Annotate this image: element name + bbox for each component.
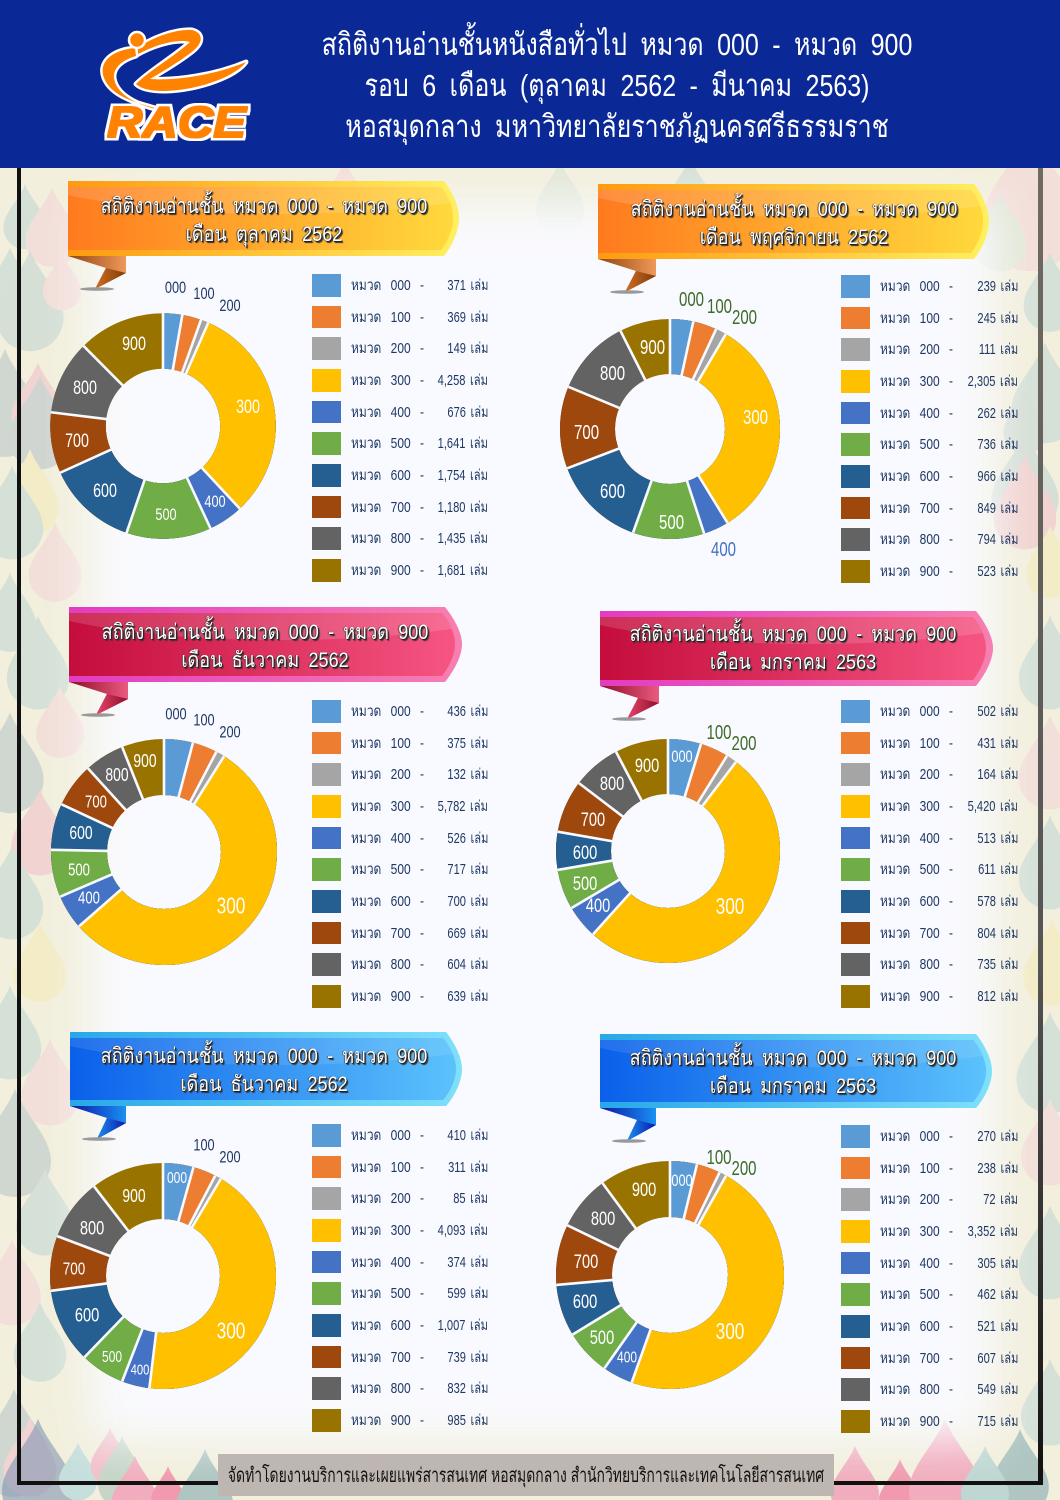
donut chart: 300: [236, 396, 260, 418]
legend: หมวด 400 -: [880, 830, 953, 847]
legend: [312, 700, 488, 1008]
legend: หมวด 600 -: [351, 893, 424, 910]
legend: 599 เล่ม: [447, 1285, 488, 1302]
banner heading: เดือน มกราคม 2563: [710, 650, 876, 674]
legend: 4,093 เล่ม: [438, 1222, 488, 1239]
legend: หมวด 200 -: [351, 766, 424, 783]
legend: 1,007 เล่ม: [438, 1317, 488, 1334]
legend: 305 เล่ม: [977, 1255, 1018, 1272]
legend: หมวด 100 -: [880, 735, 953, 752]
donut chart: 200: [219, 722, 241, 742]
legend: หมวด 900 -: [351, 1412, 424, 1429]
legend: 526 เล่ม: [447, 830, 488, 847]
legend: [841, 275, 1018, 583]
legend: หมวด 300 -: [880, 1223, 953, 1240]
legend: 85 เล่ม: [453, 1190, 488, 1207]
donut chart: 900: [640, 336, 665, 358]
donut chart: 800: [105, 765, 129, 785]
donut chart: 700: [65, 430, 89, 452]
legend: 239 เล่ม: [977, 278, 1018, 295]
legend: 1,180 เล่ม: [438, 499, 488, 516]
donut chart: 400: [617, 1348, 637, 1366]
donut chart: 500: [68, 860, 90, 880]
legend: หมวด 300 -: [351, 798, 424, 815]
donut chart: 900: [635, 754, 659, 776]
legend: 502 เล่ม: [977, 703, 1018, 720]
donut chart: 800: [600, 362, 625, 384]
donut chart: 200: [732, 1157, 757, 1179]
legend: 311 เล่ม: [448, 1159, 488, 1176]
legend: หมวด 600 -: [351, 467, 424, 484]
donut chart: 100: [193, 1135, 215, 1155]
title: รอบ 6 เดือน (ตุลาคม 2562 - มีนาคม 2563): [364, 68, 870, 103]
donut chart: 000: [165, 278, 186, 298]
banner heading: สถิติงานอ่านชั้น หมวด 000 - หมวด 900: [101, 194, 427, 218]
donut chart: 500: [102, 1347, 122, 1365]
donut chart: 500: [155, 505, 177, 525]
legend: 604 เล่ม: [447, 956, 488, 973]
legend: หมวด 800 -: [351, 1380, 424, 1397]
legend: หมวด 200 -: [351, 340, 424, 357]
legend: หมวด 900 -: [880, 563, 953, 580]
panel: December 2562: [51, 607, 488, 1008]
donut chart: 100: [707, 295, 732, 317]
legend: 513 เล่ม: [977, 830, 1018, 847]
banner heading: สถิติงานอ่านชั้น หมวด 000 - หมวด 900: [101, 1044, 427, 1068]
banner heading: สถิติงานอ่านชั้น หมวด 000 - หมวด 900: [630, 1046, 956, 1070]
legend: [841, 1125, 1018, 1433]
legend: หมวด 000 -: [351, 1127, 424, 1144]
donut chart: 600: [69, 823, 93, 843]
legend: หมวด 100 -: [880, 1160, 953, 1177]
donut chart: 600: [93, 480, 117, 502]
banner: [68, 181, 459, 291]
legend: หมวด 800 -: [351, 956, 424, 973]
donut chart: 300: [217, 894, 245, 918]
panel: October 2562: [50, 181, 488, 582]
legend: หมวด 800 -: [880, 1381, 953, 1398]
donut chart: 500: [573, 872, 597, 894]
legend: หมวด 100 -: [351, 309, 424, 326]
banner: [598, 184, 989, 294]
legend: 578 เล่ม: [977, 893, 1018, 910]
banner heading: สถิติงานอ่านชั้น หมวด 000 - หมวด 900: [102, 620, 428, 644]
legend: 410 เล่ม: [447, 1127, 488, 1144]
legend: 700 เล่ม: [447, 893, 488, 910]
legend: 849 เล่ม: [977, 500, 1018, 517]
legend: [841, 700, 1018, 1008]
banner heading: เดือน พฤศจิกายน 2562: [700, 225, 888, 249]
legend: 164 เล่ม: [977, 766, 1018, 783]
banner: [70, 1032, 462, 1141]
legend: 111 เล่ม: [979, 341, 1018, 358]
donut chart: 100: [707, 721, 732, 743]
legend: 736 เล่ม: [977, 436, 1018, 453]
title: สถิติงานอ่านชั้นหนังสือทั่วไป หมวด 000 - หมวด 900: [322, 27, 912, 62]
legend: 985 เล่ม: [447, 1412, 488, 1429]
donut chart: [50, 278, 276, 539]
banner heading: [630, 618, 958, 674]
legend: หมวด 400 -: [351, 830, 424, 847]
legend: 374 เล่ม: [447, 1254, 488, 1271]
legend: หมวด 900 -: [880, 1413, 953, 1430]
donut chart: [556, 1146, 784, 1389]
legend: หมวด 400 -: [351, 1254, 424, 1271]
legend: หมวด 000 -: [351, 277, 424, 294]
banner heading: เดือน ธันวาคม 2562: [180, 1072, 348, 1096]
legend: หมวด 200 -: [880, 341, 953, 358]
legend: หมวด 700 -: [880, 925, 953, 942]
legend: 149 เล่ม: [447, 340, 488, 357]
donut chart: 000: [679, 288, 704, 310]
legend: หมวด 500 -: [880, 436, 953, 453]
donut chart: 500: [590, 1326, 614, 1348]
donut chart: 600: [600, 480, 625, 502]
legend: 238 เล่ม: [977, 1160, 1018, 1177]
legend: [312, 274, 488, 582]
banner: [600, 1034, 992, 1143]
legend: 735 เล่ม: [977, 956, 1018, 973]
donut chart: 400: [711, 538, 736, 560]
donut chart: 900: [122, 333, 146, 355]
donut chart: 800: [600, 772, 624, 794]
legend: หมวด 800 -: [880, 956, 953, 973]
donut chart: 000: [167, 1168, 187, 1186]
panel: January 2563: [556, 611, 1018, 1008]
donut chart: [556, 721, 780, 963]
legend: หมวด 500 -: [880, 861, 953, 878]
legend: 715 เล่ม: [977, 1413, 1018, 1430]
donut chart: 700: [85, 792, 107, 812]
legend: 832 เล่ม: [447, 1380, 488, 1397]
legend: หมวด 200 -: [880, 1191, 953, 1208]
legend: หมวด 100 -: [351, 1159, 424, 1176]
donut chart: 700: [63, 1259, 85, 1279]
legend: หมวด 700 -: [880, 1350, 953, 1367]
legend: หมวด 700 -: [351, 925, 424, 942]
donut chart: [50, 1135, 276, 1389]
legend: 262 เล่ม: [977, 405, 1018, 422]
legend: 812 เล่ม: [977, 988, 1018, 1005]
donut chart: 500: [659, 511, 684, 533]
legend: หมวด 800 -: [351, 530, 424, 547]
legend: หมวด 700 -: [880, 500, 953, 517]
footer credit: [218, 1454, 834, 1496]
legend: หมวด 600 -: [880, 468, 953, 485]
donut chart: 900: [122, 1186, 146, 1206]
donut chart: 200: [219, 296, 241, 316]
banner heading: สถิติงานอ่านชั้น หมวด 000 - หมวด 900: [630, 622, 956, 646]
donut chart: 400: [204, 492, 226, 512]
legend: หมวด 600 -: [880, 893, 953, 910]
legend: 72 เล่ม: [983, 1191, 1018, 1208]
legend: หมวด 300 -: [351, 372, 424, 389]
donut chart: 900: [632, 1178, 656, 1200]
donut chart: 900: [133, 751, 157, 771]
legend: 549 เล่ม: [977, 1381, 1018, 1398]
donut chart: [560, 288, 780, 560]
banner heading: [630, 1042, 958, 1098]
legend: หมวด 600 -: [880, 1318, 953, 1335]
donut chart: 100: [707, 1146, 732, 1168]
legend: หมวด 200 -: [880, 766, 953, 783]
panel: November 2562: [560, 184, 1018, 583]
donut chart: 600: [75, 1303, 99, 1325]
banner heading: [102, 616, 430, 672]
legend: 607 เล่ม: [977, 1350, 1018, 1367]
legend: 5,420 เล่ม: [968, 798, 1018, 815]
legend: 521 เล่ม: [977, 1318, 1018, 1335]
legend: 3,352 เล่ม: [968, 1223, 1018, 1240]
legend: หมวด 100 -: [351, 735, 424, 752]
donut chart: 700: [574, 1250, 598, 1272]
donut chart: 200: [732, 306, 757, 328]
title: หอสมุดกลาง มหาวิทยาลัยราชภัฏนครศรีธรรมราช: [345, 109, 889, 144]
legend: 804 เล่ม: [977, 925, 1018, 942]
legend: หมวด 500 -: [880, 1286, 953, 1303]
legend: 1,754 เล่ม: [438, 467, 488, 484]
legend: 669 เล่ม: [447, 925, 488, 942]
legend: 371 เล่ม: [447, 277, 488, 294]
donut chart: 600: [573, 1290, 597, 1312]
legend: 966 เล่ม: [977, 468, 1018, 485]
donut chart: 000: [671, 747, 693, 767]
banner: [600, 611, 993, 721]
legend: หมวด 000 -: [880, 1128, 953, 1145]
donut chart: 300: [743, 406, 768, 428]
legend: 462 เล่ม: [977, 1286, 1018, 1303]
donut chart: 000: [165, 704, 187, 724]
donut chart: [51, 704, 277, 965]
banner heading: เดือน มกราคม 2563: [710, 1074, 876, 1098]
donut chart: 700: [581, 808, 605, 830]
header band: [0, 0, 1060, 168]
legend: 611 เล่ม: [978, 861, 1018, 878]
legend: หมวด 700 -: [351, 1349, 424, 1366]
legend: 794 เล่ม: [977, 531, 1018, 548]
legend: 436 เล่ม: [447, 703, 488, 720]
logo: RACE: RACE: [107, 98, 248, 147]
donut chart: 800: [591, 1207, 615, 1229]
legend: 132 เล่ม: [447, 766, 488, 783]
legend: 639 เล่ม: [447, 988, 488, 1005]
legend: หมวด 500 -: [351, 861, 424, 878]
banner heading: [630, 192, 959, 250]
banner heading: เดือน ตุลาคม 2562: [186, 222, 342, 246]
legend: 369 เล่ม: [447, 309, 488, 326]
legend: [312, 1124, 488, 1432]
legend: หมวด 400 -: [880, 1255, 953, 1272]
donut chart: 300: [716, 1320, 744, 1344]
legend: หมวด 900 -: [351, 988, 424, 1005]
title: [322, 22, 912, 145]
legend: หมวด 800 -: [880, 531, 953, 548]
donut chart: 100: [193, 710, 215, 730]
legend: หมวด 300 -: [351, 1222, 424, 1239]
banner heading: สถิติงานอ่านชั้น หมวด 000 - หมวด 900: [631, 197, 957, 221]
legend: หมวด 500 -: [351, 435, 424, 452]
banner heading: [100, 190, 429, 250]
legend: หมวด 300 -: [880, 798, 953, 815]
donut chart: 400: [78, 888, 100, 908]
legend: 2,305 เล่ม: [968, 373, 1018, 390]
legend: หมวด 700 -: [351, 499, 424, 516]
banner heading: [100, 1040, 429, 1096]
legend: 739 เล่ม: [447, 1349, 488, 1366]
donut chart: 300: [716, 895, 744, 919]
legend: หมวด 500 -: [351, 1285, 424, 1302]
legend: 375 เล่ม: [447, 735, 488, 752]
frame: bottom bar: [17, 1481, 1043, 1485]
banner: [69, 607, 462, 717]
legend: 4,258 เล่ม: [438, 372, 488, 389]
legend: หมวด 900 -: [880, 988, 953, 1005]
legend: หมวด 100 -: [880, 310, 953, 327]
donut chart: 200: [732, 732, 757, 754]
legend: หมวด 000 -: [351, 703, 424, 720]
legend: หมวด 900 -: [351, 562, 424, 579]
legend: 717 เล่ม: [447, 861, 488, 878]
donut chart: 600: [573, 841, 597, 863]
footer text: จัดทำโดยงานบริการและเผยแพร่สารสนเทศ หอสมุดกลาง สำนักวิทยบริการและเทคโนโลยีสารสนเทศ: [228, 1465, 824, 1487]
legend: 1,435 เล่ม: [438, 530, 488, 547]
donut chart: 400: [131, 1361, 149, 1377]
legend: หมวด 300 -: [880, 373, 953, 390]
legend: หมวด 000 -: [880, 703, 953, 720]
legend: 1,681 เล่ม: [438, 562, 488, 579]
donut chart: 400: [586, 894, 610, 916]
legend: หมวด 200 -: [351, 1190, 424, 1207]
legend: 5,782 เล่ม: [438, 798, 488, 815]
legend: 245 เล่ม: [977, 310, 1018, 327]
banner heading: เดือน ธันวาคม 2562: [181, 648, 349, 672]
donut chart: 700: [574, 421, 599, 443]
legend: หมวด 600 -: [351, 1317, 424, 1334]
donut chart: 800: [80, 1216, 104, 1238]
background: soft white centre: [90, 205, 995, 1440]
legend: 431 เล่ม: [977, 735, 1018, 752]
donut chart: 800: [73, 377, 97, 399]
legend: 1,641 เล่ม: [438, 435, 488, 452]
donut chart: 300: [217, 1319, 245, 1343]
legend: 523 เล่ม: [977, 563, 1018, 580]
frame: right bar: [1038, 168, 1043, 1485]
donut chart: 200: [219, 1147, 241, 1167]
legend: หมวด 000 -: [880, 278, 953, 295]
panel: blue left: [50, 1032, 488, 1432]
legend: 676 เล่ม: [447, 404, 488, 421]
legend: 270 เล่ม: [977, 1128, 1018, 1145]
legend: หมวด 400 -: [880, 405, 953, 422]
logo: RACE: [100, 27, 251, 147]
frame: left bar: [17, 168, 21, 1485]
panel: blue right: [556, 1034, 1018, 1433]
donut chart: 100: [193, 284, 215, 304]
donut chart: 000: [671, 1171, 693, 1191]
legend: หมวด 400 -: [351, 404, 424, 421]
